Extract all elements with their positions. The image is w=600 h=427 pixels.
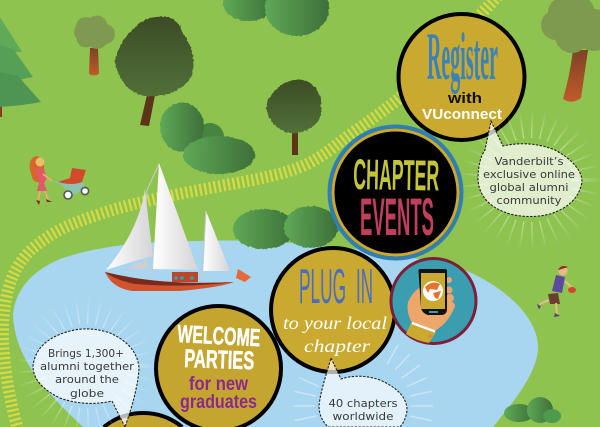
callout rays: Vanderbilt xyxy=(474,124,586,236)
callout rays: 40 chapters xyxy=(293,345,433,421)
panel: bottom circle xyxy=(104,413,182,427)
callout: Vanderbilt: Vanderbilt’s xyxy=(494,155,564,168)
callout: Brings alumni together: around the xyxy=(55,373,119,386)
heading: Welcome: WELCOME xyxy=(177,320,261,352)
callout rays: Brings xyxy=(30,310,142,422)
heading: Events: EVENTS xyxy=(360,187,434,247)
panel: Register circle xyxy=(398,14,524,140)
panel: Welcome Parties circle xyxy=(156,306,281,427)
callout: Brings alumni together: Brings 1,300+ xyxy=(48,347,124,360)
text: with: with xyxy=(447,90,482,107)
heading: Register: Register xyxy=(427,18,498,94)
upper right tree xyxy=(541,0,600,102)
callout: Vanderbilt: global alumni xyxy=(490,181,568,194)
callout: Brings alumni together: alumni together xyxy=(40,360,134,373)
callout: 40 chapters xyxy=(319,358,407,427)
heading: Plug In: PLUG xyxy=(299,258,346,313)
panel: Plug In circle xyxy=(271,248,395,372)
callout: Vanderbilt: community xyxy=(496,194,562,207)
boy with ball xyxy=(537,266,576,317)
bottom right bushes xyxy=(504,397,561,423)
callout: Vanderbilt xyxy=(478,121,582,216)
woman with stroller xyxy=(30,156,89,205)
callout: 40 chapters: worldwide xyxy=(332,410,394,423)
lake xyxy=(13,241,538,427)
panel: Chapter Events circle xyxy=(330,126,462,258)
heading: Chapter: CHAPTER xyxy=(353,151,440,200)
pine tree xyxy=(0,14,41,117)
heading: Parties: PARTIES xyxy=(184,344,255,375)
callout: Brings alumni together xyxy=(33,329,139,427)
text: chapter: chapter xyxy=(304,336,371,356)
small olive tree xyxy=(74,16,115,76)
central bushes xyxy=(160,102,255,174)
text: to your local: to your local xyxy=(283,313,387,333)
text: VUconnect: VUconnect xyxy=(422,106,502,123)
lakeside bushes xyxy=(233,206,338,249)
dark tree by bushes xyxy=(267,80,321,155)
icon: hand holding phone xyxy=(391,258,476,344)
callout: Vanderbilt: exclusive online xyxy=(483,168,575,181)
text: for new: for new xyxy=(189,374,248,395)
heading: Plug In: IN xyxy=(356,258,373,313)
top bushes xyxy=(223,0,329,36)
text: graduates: graduates xyxy=(180,392,257,413)
large dark tree xyxy=(115,17,194,126)
callout: 40 chapters: 40 chapters xyxy=(328,397,398,410)
callout: Brings alumni together: globe xyxy=(70,387,104,400)
sailboat xyxy=(105,163,251,291)
